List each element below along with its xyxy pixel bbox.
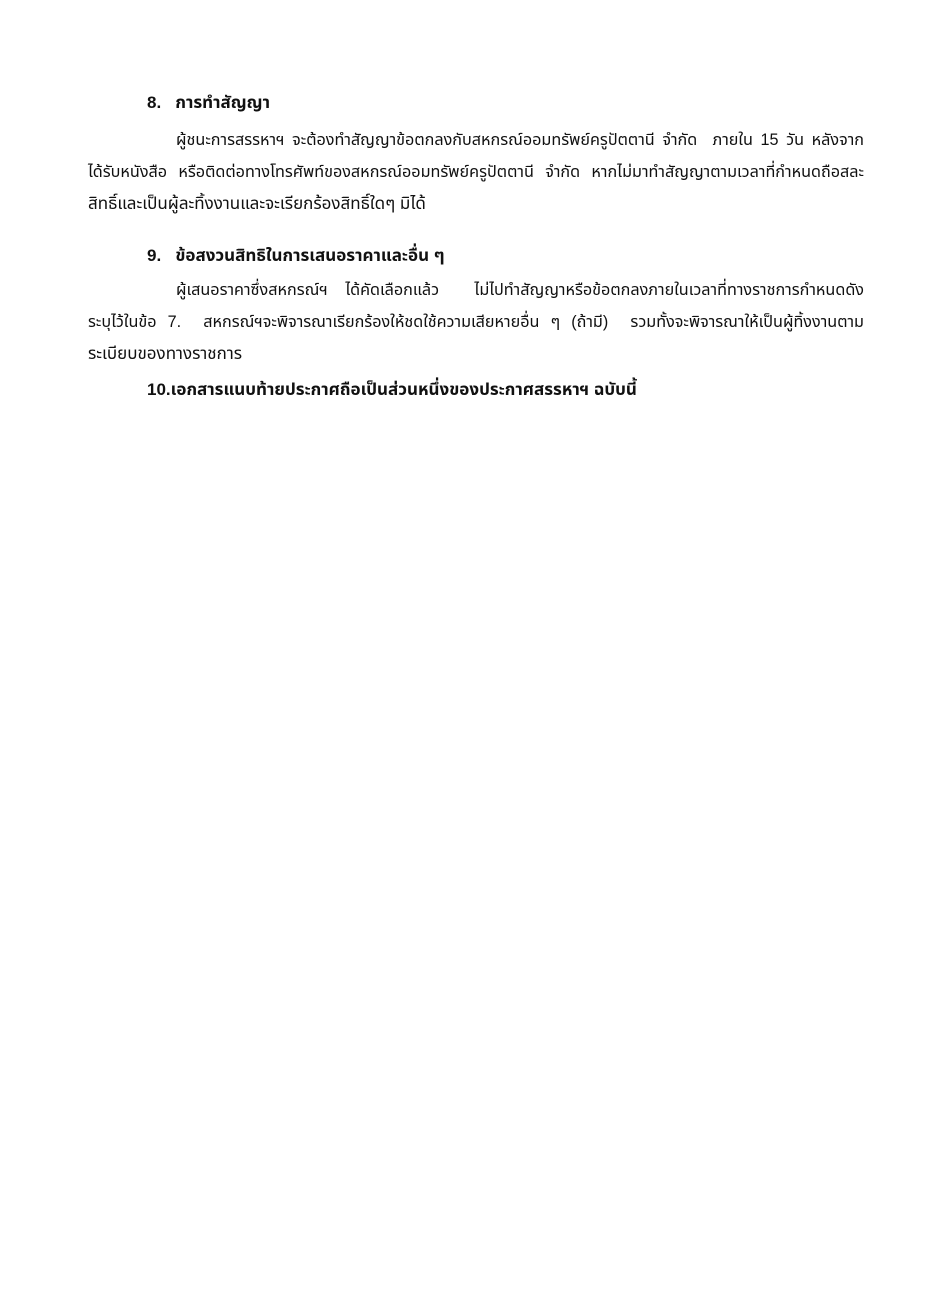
heading 9: 9. ข้อสงวนสิทธิในการเสนอราคาและอื่น ๆ (147, 246, 445, 265)
section 8 (88, 93, 864, 214)
paragraph 9: ระเบียบของทางราชการ (88, 344, 242, 363)
paragraph 8: สิทธิ์และเป็นผู้ละทิ้งงานและจะเรียกร้องสิทธิ์ใดๆ มิได้ (88, 194, 426, 213)
paragraph 8: ผู้ชนะการสรรหาฯ จะต้องทำสัญญาข้อตกลงกับสหกรณ์ออมทรัพย์ครูปัตตานี จำกัด ภายใน 15 วัน หลังจาก (176, 131, 864, 149)
paragraph 8: ได้รับหนังสือ หรือติดต่อทางโทรศัพท์ของสหกรณ์ออมทรัพย์ครูปัตตานี จำกัด หากไม่มาทำสัญญาตามเวลาที่กำหนดถือสละ (88, 163, 864, 181)
paragraph 9 (88, 278, 864, 363)
paragraph 9: ระบุไว้ในข้อ 7. สหกรณ์ฯจะพิจารณาเรียกร้องให้ชดใช้ความเสียหายอื่น ๆ (ถ้ามี) รวมทั้งจะพิจารณาให้เป็นผู้ทิ้งงานตาม (88, 313, 864, 331)
heading 8: 8. การทำสัญญา (147, 93, 270, 112)
heading 10: 10.เอกสารแนบท้ายประกาศถือเป็นส่วนหนึ่งของประกาศสรรหาฯ ฉบับนี้ (147, 380, 637, 399)
paragraph 9: ผู้เสนอราคาซึ่งสหกรณ์ฯ ได้คัดเลือกแล้ว ไม่ไปทำสัญญาหรือข้อตกลงภายในเวลาที่ทางราชการกำหนดดัง (176, 281, 864, 299)
section 9 (88, 243, 864, 363)
paragraph 8 (88, 131, 864, 214)
